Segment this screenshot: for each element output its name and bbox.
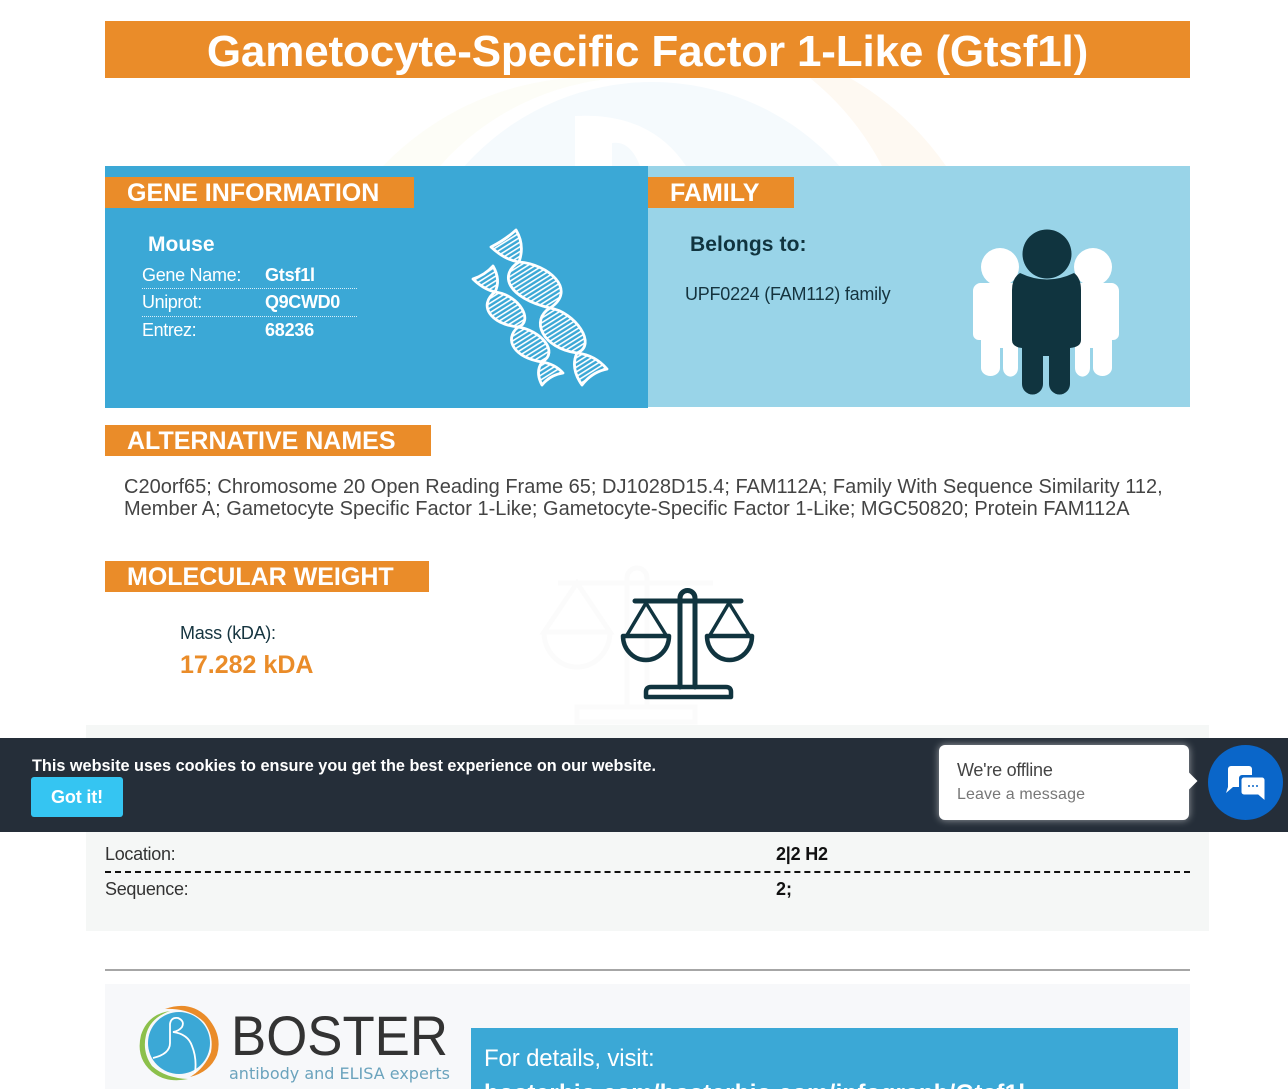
sequence row: [105, 879, 792, 899]
icon: dna helices: [472, 228, 608, 386]
gene fields: Gtsf1l: [265, 265, 315, 285]
heading: gene information: GENE INFORMATION: [127, 179, 379, 207]
cookie message: This website uses cookies to ensure you get the best experience on our website.: [32, 757, 656, 775]
watermark scale: [535, 560, 725, 730]
title banner: Gametocyte-Specific Factor 1-Like (Gtsf1l): [207, 27, 1088, 76]
gene fields: Uniprot:: [142, 292, 202, 312]
sequence row: Sequence:: [105, 879, 188, 899]
boster logo: antibody and ELISA experts: [229, 1064, 450, 1083]
heading: molecular weight: MOLECULAR WEIGHT: [127, 563, 394, 591]
belongs to label: Belongs to:: [690, 233, 807, 256]
details label: For details, visit:: [484, 1045, 655, 1072]
location row: [105, 844, 1190, 873]
panel: footer: [105, 984, 1190, 1089]
alternative names text: [124, 476, 1163, 520]
mass label: Mass (kDA):: [180, 623, 276, 643]
gene fields: 68236: [265, 320, 314, 340]
heading: family: FAMILY: [670, 179, 759, 207]
details callout: [471, 1028, 1178, 1089]
gene fields: Entrez:: [142, 320, 196, 340]
cookie button: Got it!: [51, 787, 103, 807]
boster logo: [140, 1004, 450, 1083]
title banner: [105, 21, 1190, 78]
icon: balance scale: [620, 588, 754, 700]
chat prompt: Leave a message: [957, 786, 1085, 803]
boster logo: BOSTER: [231, 1004, 448, 1067]
chat bubble: [939, 745, 1189, 820]
gene fields: Q9CWD0: [265, 292, 340, 312]
chat button: [1208, 745, 1283, 820]
panel: chromosome details: [86, 725, 1209, 931]
location row: Location:: [105, 844, 175, 864]
mass value: 17.282 kDA: [180, 651, 313, 679]
chat status: We're offline: [957, 760, 1053, 780]
family value: UPF0224 (FAM112) family: [685, 284, 890, 304]
heading: family: [648, 177, 794, 208]
panel: gene information: [105, 166, 648, 408]
gene fields: [142, 265, 357, 340]
icon: family group: [973, 230, 1119, 394]
gene fields: Gene Name:: [142, 265, 241, 285]
heading: alternative names: ALTERNATIVE NAMES: [127, 427, 396, 455]
divider rule: [105, 969, 1190, 971]
bubble pointer: [1181, 773, 1197, 789]
species label: Mouse: [148, 233, 215, 256]
cookie banner: [0, 738, 1288, 832]
sequence row: 2;: [776, 879, 792, 899]
panel: family: [648, 166, 1190, 407]
watermark logo: [465, 78, 946, 166]
alternative names text: Member A; Gametocyte Specific Factor 1-Like; Gametocyte-Specific Factor 1-Like; MGC50820; Protein FAM112A: [124, 498, 1130, 520]
cookie button: [31, 777, 123, 817]
location row: 2|2 H2: [776, 844, 828, 864]
alternative names text: C20orf65; Chromosome 20 Open Reading Frame 65; DJ1028D15.4; FAM112A; Family With Sequence Similarity 112,: [124, 476, 1163, 498]
